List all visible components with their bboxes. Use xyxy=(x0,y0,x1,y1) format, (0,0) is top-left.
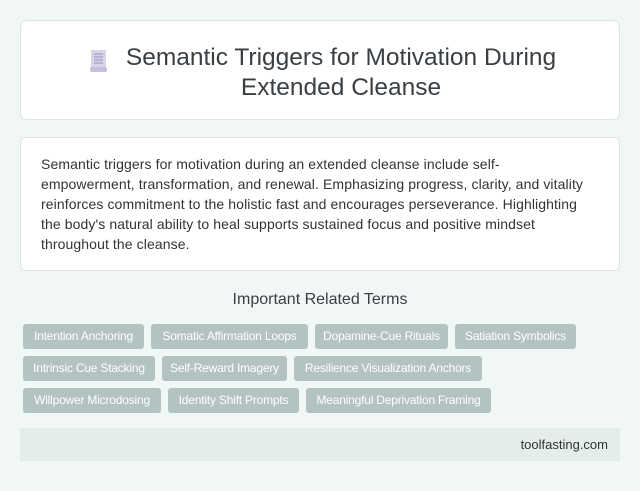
tags: Dopamine-Cue Rituals xyxy=(323,329,440,343)
tags: Meaningful Deprivation Framing xyxy=(316,393,481,407)
description text: reinforces commitment to the holistic fast and encourages perseverance. Highlighting xyxy=(41,196,577,212)
footer xyxy=(20,428,620,461)
tags: Satiation Symbolics xyxy=(465,329,566,343)
description text: the body's natural ability to heal supports sustained focus and positive mindset xyxy=(41,216,535,232)
heading: related terms: Important Related Terms xyxy=(233,291,407,308)
description card xyxy=(20,137,620,271)
description text: empowerment, transformation, and renewal. Emphasizing progress, clarity, and vitality xyxy=(41,176,583,192)
tags: Intention Anchoring xyxy=(34,329,133,343)
tags: Resilience Visualization Anchors xyxy=(305,361,471,375)
title: Semantic Triggers for Motivation During Extended Cleanse xyxy=(126,44,556,101)
tags: Intrinsic Cue Stacking xyxy=(33,361,145,375)
footer: toolfasting.com xyxy=(521,437,608,452)
tags: Somatic Affirmation Loops xyxy=(162,329,297,343)
tags: Willpower Microdosing xyxy=(34,393,150,407)
title card xyxy=(20,20,620,120)
tags: Identity Shift Prompts xyxy=(179,393,288,407)
description text xyxy=(41,156,583,252)
tags: Self-Reward Imagery xyxy=(170,361,279,375)
description text: throughout the cleanse. xyxy=(41,236,190,252)
description text: Semantic triggers for motivation during an extended cleanse include self- xyxy=(41,156,500,172)
icon: document xyxy=(90,50,107,72)
